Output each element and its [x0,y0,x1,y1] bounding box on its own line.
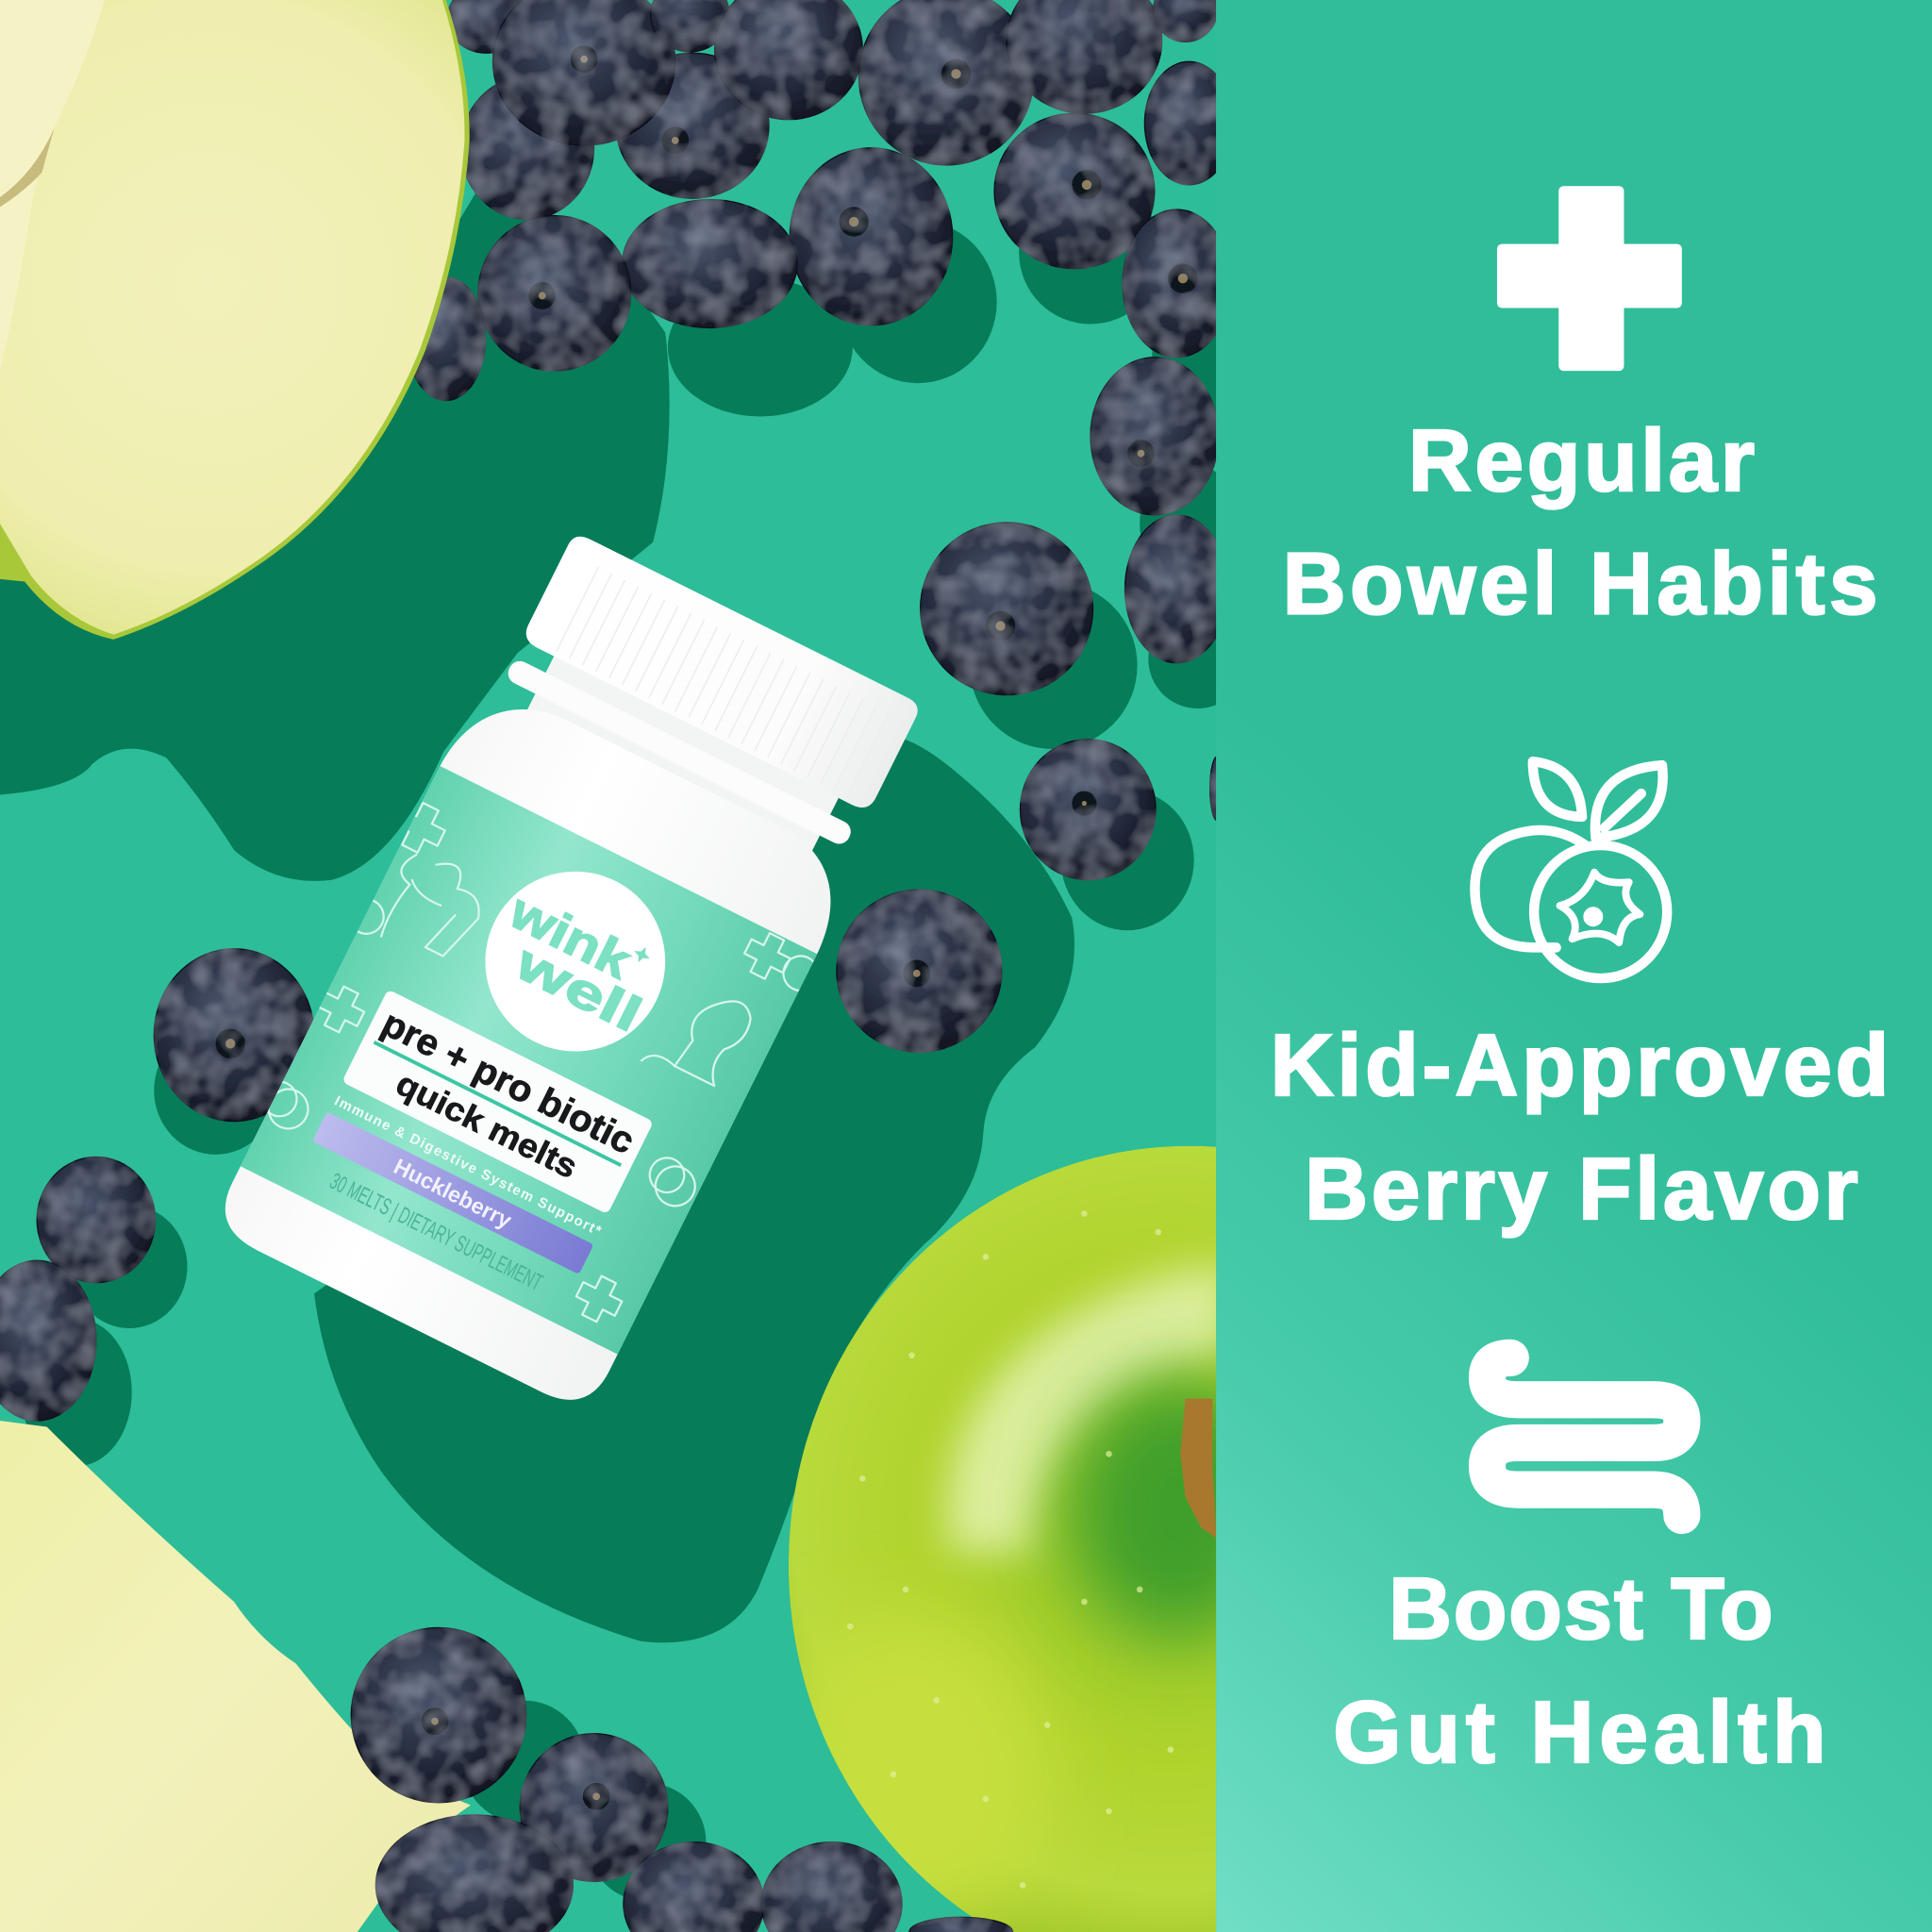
icon: intestine [1487,1357,1682,1516]
blueberries [0,0,1233,1932]
heading: kid-approved berry flavor: Kid-Approved [1271,1016,1889,1114]
label line art [267,802,814,1323]
apple stem [1180,1398,1216,1538]
heading: regular bowel habits: Regular [1408,411,1755,509]
product name box: pre + pro biotic [375,1003,641,1162]
count text: 30 MELTS | DIETARY SUPPLEMENT [325,1169,546,1296]
icon: berries and leaves [1474,761,1667,978]
flavor band [312,1111,593,1274]
claim text: Immune & Digestive System Support* [332,1093,604,1240]
heading: regular bowel habits: Bowel Habits [1283,534,1878,632]
icon: medical cross [1497,186,1682,371]
flavor band: Huckleberry [390,1154,515,1233]
apple slice: bottom left [0,1421,471,1932]
heading: kid-approved berry flavor [1271,1016,1889,1238]
logo badge: wink [500,884,641,991]
heading: regular bowel habits [1283,411,1878,632]
panel: benefits [1216,0,1932,1932]
heading: boost to gut health [1333,1559,1826,1781]
logo badge: well [507,935,650,1043]
pill bottle [225,536,918,1400]
bottle body [225,657,851,1400]
green apple [789,1145,1217,1932]
bottle cap [521,532,922,813]
heading: boost to gut health: Boost To [1389,1559,1774,1657]
heading: boost to gut health: Gut Health [1333,1683,1826,1781]
product name box: quick melts [391,1065,583,1186]
apple slice: top left [0,0,470,640]
logo badge [455,841,696,1082]
heading: kid-approved berry flavor: Berry Flavor [1305,1140,1858,1238]
product name box [341,990,654,1214]
panel: product photo [0,0,1217,1932]
label [226,758,827,1359]
cast shadows [0,181,1251,1901]
